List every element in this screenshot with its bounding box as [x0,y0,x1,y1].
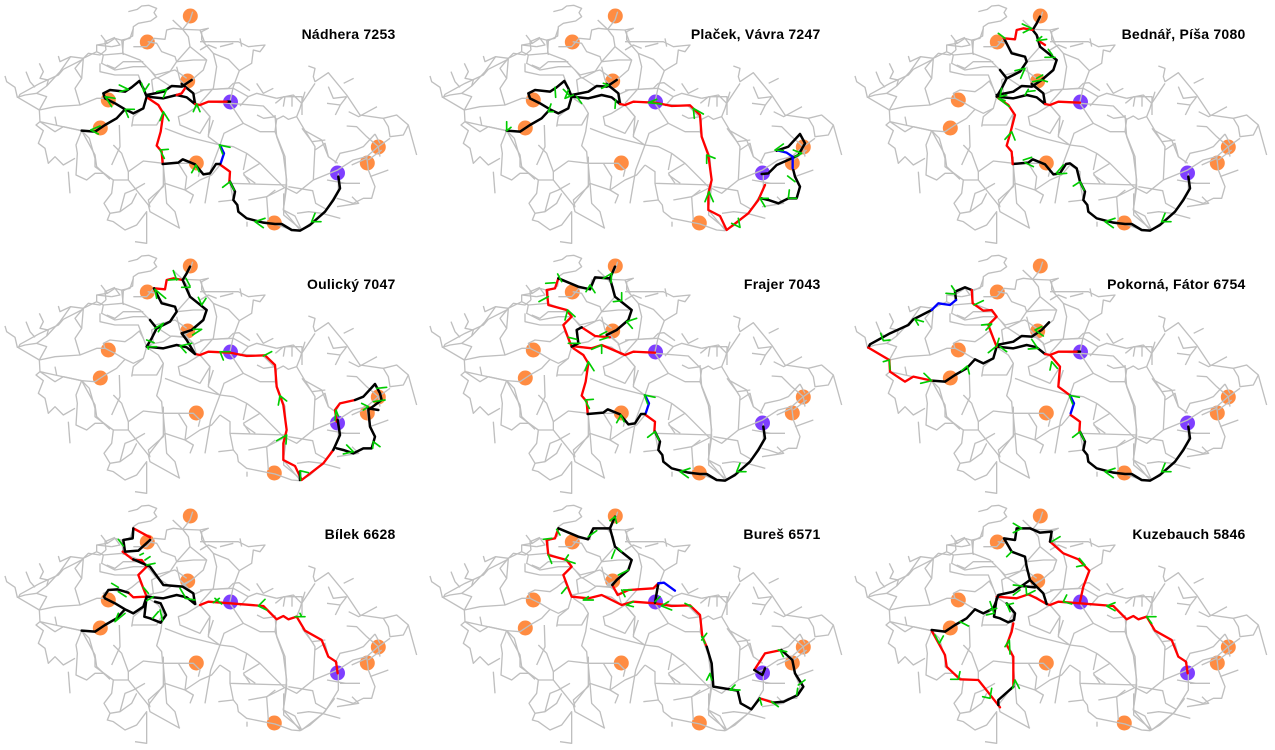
route overlay [147,267,387,480]
panel: Nádhera 7253 [5,5,417,243]
map: rail network and stations [855,5,1267,243]
map: rail network and stations [5,5,417,243]
panel: Bílek 6628 [5,505,417,743]
route overlay [997,17,1190,231]
title: Bílek 6628 [325,526,396,542]
panel: Plaček, Vávra 7247 [430,5,842,243]
panel: Frajer 7043 [430,255,842,493]
panel: Bednář, Píša 7080 [855,5,1267,243]
map: rail network and stations [5,255,417,493]
title: Kuzebauch 5846 [1132,526,1246,542]
map: rail network and stations [855,505,1267,743]
title: Plaček, Vávra 7247 [691,26,820,42]
title: Bureš 6571 [743,526,820,542]
panel: Pokorná, Fátor 6754 [855,255,1267,493]
route overlay [868,286,1190,481]
title: Nádhera 7253 [302,26,396,42]
map: rail network and stations [430,5,842,243]
map: rail network and stations [5,505,417,743]
map: rail network and stations [855,255,1267,493]
route overlay [932,523,1188,707]
route overlay [82,80,340,231]
panel: Kuzebauch 5846 [855,505,1267,743]
title: Pokorná, Fátor 6754 [1107,276,1246,292]
map: rail network and stations [430,505,842,743]
title: Oulický 7047 [307,276,396,292]
route overlay [539,267,765,481]
title: Frajer 7043 [744,276,820,292]
route overlay [507,80,805,230]
panel: Oulický 7047 [5,255,417,493]
route overlay [82,528,338,673]
panel: Bureš 6571 [430,505,842,743]
route overlay [543,517,805,709]
title: Bednář, Píša 7080 [1122,26,1246,42]
map: rail network and stations [430,255,842,493]
